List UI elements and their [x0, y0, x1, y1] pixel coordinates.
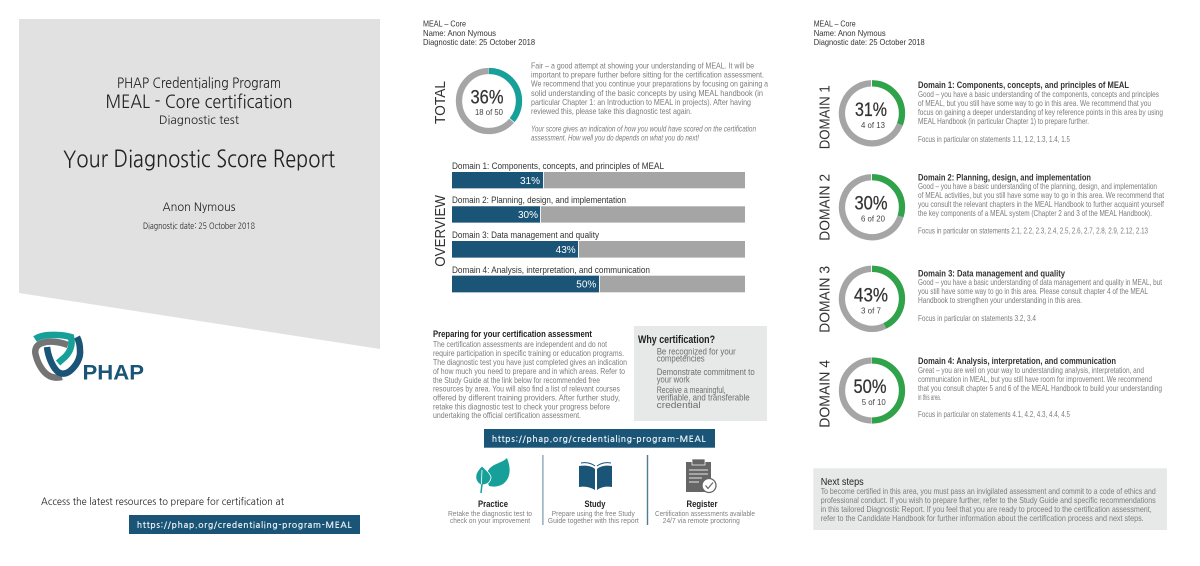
domain 4 section [816, 356, 1162, 428]
domain 3 text: Handbook to strengthen your understanding in this area. [918, 296, 1082, 305]
column: practice [448, 458, 532, 525]
panel: cover page [19, 19, 380, 534]
bar: domain 2: 30% [518, 210, 538, 221]
bar: domain 1: 31% [520, 176, 540, 187]
domain 1 text [918, 80, 1163, 144]
domain 2 label: DOMAIN 2 [816, 174, 833, 241]
study label: Study [584, 499, 606, 509]
link button: https://phap.org/credentialing-program-MEAL [137, 521, 352, 530]
total commentary: Fair – a good attempt at showing your understanding of MEAL. It will be [531, 62, 754, 70]
overview label: OVERVIEW [432, 194, 449, 267]
logo: PHAP: PHAP [82, 362, 144, 384]
domain 3 donut: 43% [854, 286, 888, 306]
program name: PHAP Credentialing Program [117, 76, 281, 91]
domain 1 text: MEAL Handbook (in particular Chapter 1) to prepare further. [918, 117, 1089, 126]
panel: why certification: Why certification? [638, 334, 715, 346]
resources text: Access the latest resources to prepare for certification at [41, 496, 284, 507]
total donut chart: 36% [470, 88, 504, 108]
domain 4 donut [842, 360, 902, 421]
page header: MEAL – Core [814, 18, 856, 28]
total commentary: particular Chapter 1: an Introduction to MEAL in projects). After having [531, 98, 751, 107]
text block: preparing for assessment: require participation in specific training or education programs. [433, 349, 624, 358]
panel: overview page [423, 18, 768, 525]
bar chart: domain scores [452, 161, 745, 292]
total commentary: Your score gives an indication of how you would have scored on the certification [531, 124, 756, 134]
bar: domain 3: 43% [556, 245, 576, 256]
text block: preparing for assessment: retake this diagnostic test to check your progress before [433, 402, 610, 412]
total commentary: assessment. How well you do depends on what you do next! [531, 134, 700, 143]
page header [423, 18, 535, 47]
domain 3 label: DOMAIN 3 [816, 266, 833, 333]
total label: TOTAL [432, 81, 449, 124]
candidate name: Anon Nymous [162, 201, 236, 213]
panel: why certification: competencies [657, 354, 705, 364]
panel: why certification: verifiable, and transferable [657, 392, 750, 402]
text block: preparing for assessment: The certification assessments are independent and do not [433, 340, 608, 349]
domain 4 text: Domain 4: Analysis, interpretation, and communication [918, 356, 1116, 367]
total commentary: important to prepare further before sitting for the certification assessment. [531, 71, 764, 80]
link button [129, 515, 360, 534]
panel: why certification: your work [657, 374, 690, 384]
bar: domain 2: Domain 2: Planning, design, and implementation [452, 195, 626, 205]
column: register [655, 459, 755, 525]
diagnostic test label: Diagnostic test [159, 114, 240, 126]
title: Your Diagnostic Score Report [63, 148, 336, 171]
panel: next steps: in this tailored Diagnostic Report. If you feel that you are ready to proceed to the certification assessment, [821, 505, 1152, 514]
page header: Name: Anon Nymous [423, 28, 496, 38]
link button: https://phap.org/credentialing-program-MEAL [492, 435, 706, 444]
domain 3 donut: 3 of 7 [861, 306, 881, 316]
panel: why certification: Be recognized for your [657, 346, 736, 356]
total commentary: We recommend that you continue your preparations by focusing on gaining a [531, 80, 768, 89]
practice description: Retake the diagnostic test to [448, 509, 532, 518]
text block: preparing for assessment [433, 329, 627, 420]
total commentary [531, 62, 768, 143]
page header: Diagnostic date: 25 October 2018 [423, 37, 535, 47]
cover background shape [19, 19, 380, 349]
total commentary: reviewed this, please take this diagnostic test again. [531, 107, 692, 116]
domain 2 donut [834, 169, 910, 245]
domain 3 donut [832, 259, 912, 339]
study description: Guide together with this report [548, 516, 640, 525]
bar: domain 3 [452, 230, 745, 258]
panel: next steps: professional conduct. If you wish to prepare further, refer to the Study Guide and specific recommendations [821, 496, 1156, 505]
logo: PHAP [35, 335, 144, 384]
register description: 24/7 via remote proctoring [663, 516, 740, 525]
icon: clipboard with check [686, 459, 716, 492]
domain 3 section [816, 259, 1163, 339]
icon: leaves [476, 458, 510, 493]
domain 3 text: Domain 3: Data management and quality [918, 268, 1066, 280]
text block: preparing for assessment: Preparing for your certification assessment [433, 329, 592, 339]
domain 2 section [816, 169, 1165, 245]
domain 1 donut: 4 of 13 [861, 120, 885, 130]
diagnostic date: Diagnostic date: 25 October 2018 [143, 222, 255, 231]
domain 2 text: Domain 2: Planning, design, and implementation [918, 172, 1091, 184]
bar: domain 1: Domain 1: Components, concepts, and principles of MEAL [452, 161, 664, 171]
text block: preparing for assessment: The diagnostic test you have just completed gives an indication [433, 358, 627, 367]
domain 3 text [918, 268, 1163, 323]
domain 2 donut: 6 of 20 [861, 214, 885, 224]
bar: domain 1 [452, 161, 745, 188]
panel: why certification: credential [657, 400, 701, 410]
text block: preparing for assessment: offered by different training providers. After further study, [433, 394, 620, 402]
domain 1 label: DOMAIN 1 [816, 85, 833, 149]
domain 4 text [918, 356, 1162, 419]
domain 1 text: Domain 1: Components, concepts, and principles of MEAL [918, 80, 1129, 91]
panel: next steps: Next steps [821, 476, 864, 488]
page header: Diagnostic date: 25 October 2018 [814, 37, 925, 47]
register description: Certification assessments available [655, 509, 755, 518]
panel: why certification: Demonstrate commitment to [657, 367, 755, 377]
text block: preparing for assessment: resources by area. You will also find a list of relevant courses [433, 384, 620, 394]
panel: next steps [813, 468, 1167, 530]
domain 4 donut: 5 of 10 [862, 397, 886, 407]
domain 1 donut: 31% [855, 100, 887, 121]
bar: domain 4 [452, 265, 745, 292]
link button [484, 429, 715, 448]
domain 1 donut [833, 74, 911, 152]
domain 2 text [918, 172, 1165, 236]
total donut chart: 18 of 50 [475, 107, 503, 117]
panel: why certification: Receive a meaningful, [657, 385, 726, 395]
total donut chart [447, 59, 531, 143]
study description: Prepare using the free Study [552, 509, 635, 518]
domain 1 text: Focus in particular on statements 1.1, 1.2, 1.3, 1.4, 1.5 [918, 135, 1070, 144]
panel: next steps: refer to the Candidate Handbook for further information about the certification process and next steps. [821, 514, 1144, 523]
bar: domain 4: Domain 4: Analysis, interpretation, and communication [452, 265, 650, 275]
text block: preparing for assessment: the Study Guide at the link below for recommended free [433, 376, 600, 385]
domain 4 label: DOMAIN 4 [816, 360, 833, 428]
domain 4 donut: 50% [854, 377, 887, 398]
text block: preparing for assessment: of how much you need to prepare and in which areas. Refer to [433, 367, 625, 376]
page header: MEAL – Core [423, 18, 466, 28]
text block: preparing for assessment: undertaking the official certification assessment. [433, 411, 581, 420]
domain 3 text: Focus in particular on statements 3.2, 3.4 [918, 314, 1036, 323]
domain 4 text: in this area. [918, 393, 941, 402]
page header: Name: Anon Nymous [814, 28, 886, 38]
study description [548, 509, 640, 525]
bar: domain 4: 50% [576, 280, 596, 290]
bar: domain 3: Domain 3: Data management and quality [452, 230, 599, 240]
register description [655, 509, 755, 525]
panel: domain details page [813, 18, 1167, 530]
practice description: check on your improvement [450, 516, 531, 525]
domain 1 section [816, 74, 1163, 152]
domain 4 text: Great – you are well on your way to understanding analysis, interpretation, and [918, 366, 1144, 375]
certification name: MEAL - Core certification [106, 93, 292, 111]
practice description [448, 509, 532, 525]
icon: open book [579, 463, 612, 490]
domain 2 donut: 30% [854, 194, 888, 214]
page header [814, 18, 925, 47]
domain 4 text: Focus in particular on statements 4.1, 4.2, 4.3, 4.4, 4.5 [918, 410, 1070, 419]
register label: Register [686, 499, 718, 509]
practice label: Practice [478, 499, 508, 509]
bar: domain 2 [452, 195, 745, 223]
panel: why certification [634, 326, 767, 421]
column: study [548, 463, 640, 525]
total commentary: solid understanding of the basic concepts by using MEAL handbook (in [531, 89, 763, 98]
